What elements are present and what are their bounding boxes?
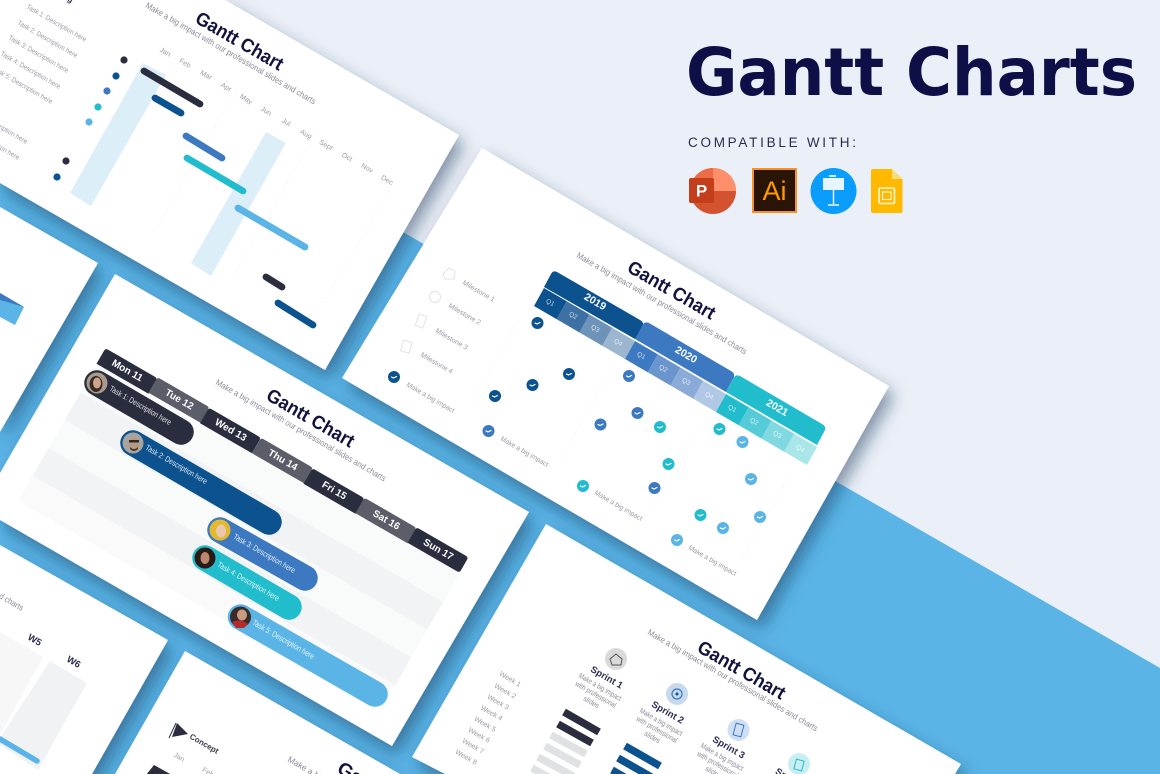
sprint 1 icon xyxy=(605,648,627,670)
month labels: Sept xyxy=(318,139,334,152)
day tab Tue 12: Tue 12 xyxy=(163,388,196,413)
partial year tab xyxy=(0,293,24,325)
milestone labels xyxy=(419,280,496,376)
sprint 2 text: slides xyxy=(643,729,662,745)
icon: PowerPoint xyxy=(689,168,736,214)
sprint 3 icon xyxy=(728,719,750,741)
sprint 1 bars xyxy=(532,712,599,774)
day tab Wed 13: Wed 13 xyxy=(213,417,249,444)
week labels: W6 xyxy=(64,654,82,671)
quarters 2021: Q4 xyxy=(794,444,806,454)
impact labels xyxy=(405,382,737,578)
day tab Wed 13 xyxy=(200,408,261,453)
month labels: Jul xyxy=(280,117,292,128)
month labels: May xyxy=(238,93,254,106)
progress bar xyxy=(0,739,37,761)
week labels: W5 xyxy=(26,632,44,649)
main heading: Gantt Charts xyxy=(686,34,1137,111)
title: Gantt Chart xyxy=(694,637,789,705)
week labels xyxy=(26,632,82,671)
day tab Fri 15 xyxy=(304,468,364,514)
month labels: Apr xyxy=(219,82,233,94)
task 3 pill: Task 3: Description here xyxy=(232,532,297,575)
day tab Sun 17: Sun 17 xyxy=(421,537,455,563)
day tab Sat 16: Sat 16 xyxy=(370,508,402,533)
task 1 pill: Task 1: Description here xyxy=(108,384,173,427)
quarters 2019 xyxy=(534,288,635,359)
year 2019 tab xyxy=(544,271,643,339)
day tab Fri 15: Fri 15 xyxy=(320,480,349,503)
day tab Sat 16 xyxy=(356,498,416,543)
dark bar xyxy=(146,765,172,774)
month labels: Jan xyxy=(172,752,185,764)
week labels: Week 7 xyxy=(461,738,485,756)
impact labels: Make a big impact xyxy=(405,382,455,415)
task list labels: Task 4: Description here xyxy=(0,51,61,91)
impact labels: Make a big impact xyxy=(593,490,643,523)
title: Gantt Chart xyxy=(624,257,719,325)
day tab Mon 11 xyxy=(97,348,157,394)
icon: Illustrator: Ai xyxy=(762,176,787,206)
icon: Illustrator xyxy=(753,169,796,212)
day tab Thu 14: Thu 14 xyxy=(266,448,300,474)
day tab Mon 11: Mon 11 xyxy=(110,358,145,384)
icon: Google Slides xyxy=(871,169,902,213)
month labels: Mar xyxy=(199,70,213,82)
compatible with label: COMPATIBLE WITH: xyxy=(688,135,856,150)
quarters 2020: Q4 xyxy=(703,391,715,401)
task 2 pill xyxy=(122,432,269,522)
sprint 2 text: with professional xyxy=(634,714,679,745)
day tab Sun 17 xyxy=(408,527,468,573)
highlight bands xyxy=(70,63,286,276)
year 2021 tab xyxy=(726,375,825,445)
task list labels: Task 2: Description here xyxy=(16,20,78,60)
tick markers navy xyxy=(388,317,575,402)
panel: slide weekly columns xyxy=(0,545,168,774)
task 1 pill xyxy=(86,372,181,432)
year 2021 tab: 2021 xyxy=(764,397,790,419)
gantt bars xyxy=(144,71,313,325)
quarters 2019: Q1 xyxy=(544,298,556,308)
quarters 2020 xyxy=(625,341,726,412)
week labels: Week 2 xyxy=(493,683,517,701)
panel: slide left partial xyxy=(0,207,98,432)
sprint 1 text: Sprint 1 xyxy=(588,664,625,692)
panel: slide daily schedule xyxy=(0,274,529,746)
month labels: Jan xyxy=(158,47,171,59)
month labels: Oct xyxy=(340,152,353,163)
week labels: Week 5 xyxy=(473,716,497,734)
panel: slide concept timeline xyxy=(115,651,400,774)
sprint 1 text: with professional xyxy=(573,679,618,710)
flag icon xyxy=(169,723,188,738)
subtitle: Make a big impact with our professional slides and charts xyxy=(144,0,318,106)
month labels xyxy=(158,47,394,187)
panel: slide timeline by month xyxy=(0,0,459,370)
task 4 pill xyxy=(194,548,289,607)
sprint 1 text: slides xyxy=(582,694,601,710)
sprint 3 text: Sprint 3 xyxy=(710,734,747,761)
column bands xyxy=(0,632,87,770)
week labels xyxy=(454,671,522,767)
quarters 2020: Q3 xyxy=(680,377,692,387)
milestone labels: Milestone 4 xyxy=(419,352,454,376)
panel: slide sprints xyxy=(412,524,961,774)
month labels: Dec xyxy=(380,175,394,187)
year 2020 tab xyxy=(635,322,734,392)
task 4 pill: Task 4: Description here xyxy=(216,560,281,603)
week labels: Week 8 xyxy=(454,749,478,767)
milestone labels: Milestone 2 xyxy=(447,303,482,327)
subtitle: Make a big impact with our professional slides and charts xyxy=(214,377,388,483)
tick markers light blue xyxy=(671,436,766,546)
task 3 pill xyxy=(210,520,305,578)
month labels xyxy=(172,752,215,774)
sprint 2 text: Make a big impact xyxy=(638,706,685,738)
week labels: Week 6 xyxy=(467,727,491,745)
tick markers teal xyxy=(577,421,726,521)
quarters 2019: Q3 xyxy=(589,324,601,334)
concept label: Concept xyxy=(188,732,221,756)
sprint 3 text xyxy=(690,731,752,774)
icon: PowerPoint: P xyxy=(696,182,707,200)
task 5 pill xyxy=(230,606,375,694)
quarters 2021 xyxy=(716,394,817,465)
month labels: Jun xyxy=(259,106,272,118)
milestone labels: Milestone 1 xyxy=(461,280,496,304)
task 2 pill: Task 2: Description here xyxy=(144,443,209,486)
sprint 4 icon xyxy=(788,753,810,774)
impact labels: Make a big impact xyxy=(687,545,737,578)
week labels: Week 1 xyxy=(498,671,522,689)
quarters 2019: Q2 xyxy=(567,311,579,321)
quarters 2020: Q1 xyxy=(635,351,647,361)
month labels: Feb xyxy=(178,58,192,70)
milestone icons xyxy=(401,268,455,353)
sprint 1 text xyxy=(568,661,630,718)
task list labels: Task 1: Description here xyxy=(25,4,87,44)
icon: Keynote xyxy=(810,168,856,214)
panel: slide milestones by quarter xyxy=(342,148,889,620)
task list labels xyxy=(0,0,87,162)
tick markers blue xyxy=(482,370,660,494)
impact labels: Make a big impact xyxy=(499,436,549,469)
month labels: Nov xyxy=(360,163,374,175)
subtitle: Make a big impact with our professional slides and charts xyxy=(575,250,749,356)
quarters 2021: Q3 xyxy=(771,430,783,440)
title: Gantt Chart xyxy=(192,8,287,76)
subtitle: Make a big impact with our professional slides and charts xyxy=(646,627,820,733)
title: Gantt Chart xyxy=(262,385,358,453)
day tab Thu 14 xyxy=(252,438,313,483)
task dots xyxy=(53,56,128,181)
week labels: Week 3 xyxy=(486,694,510,712)
sprint 2 bars xyxy=(612,746,660,774)
quarters 2021: Q1 xyxy=(726,404,738,414)
month labels: Aug xyxy=(299,129,313,141)
week labels: Week 4 xyxy=(479,705,503,723)
milestone labels: Milestone 3 xyxy=(434,328,469,352)
quarters 2021: Q2 xyxy=(748,417,760,427)
row stripes xyxy=(33,393,443,685)
task list labels: Task 3: Description here xyxy=(7,35,69,75)
sprint 1 text: Make a big impact xyxy=(577,671,624,703)
year 2020 tab: 2020 xyxy=(673,344,699,366)
day tab Tue 12 xyxy=(149,377,209,423)
task 5 pill: Task 5: Description here xyxy=(251,618,316,661)
quarters 2020: Q2 xyxy=(657,364,669,374)
year 2019 tab: 2019 xyxy=(582,291,608,313)
sprint 2 icon xyxy=(666,683,688,705)
sprint 2 text xyxy=(629,696,691,753)
quarters 2019: Q4 xyxy=(612,338,624,348)
sprint 2 text: Sprint 2 xyxy=(649,699,686,726)
